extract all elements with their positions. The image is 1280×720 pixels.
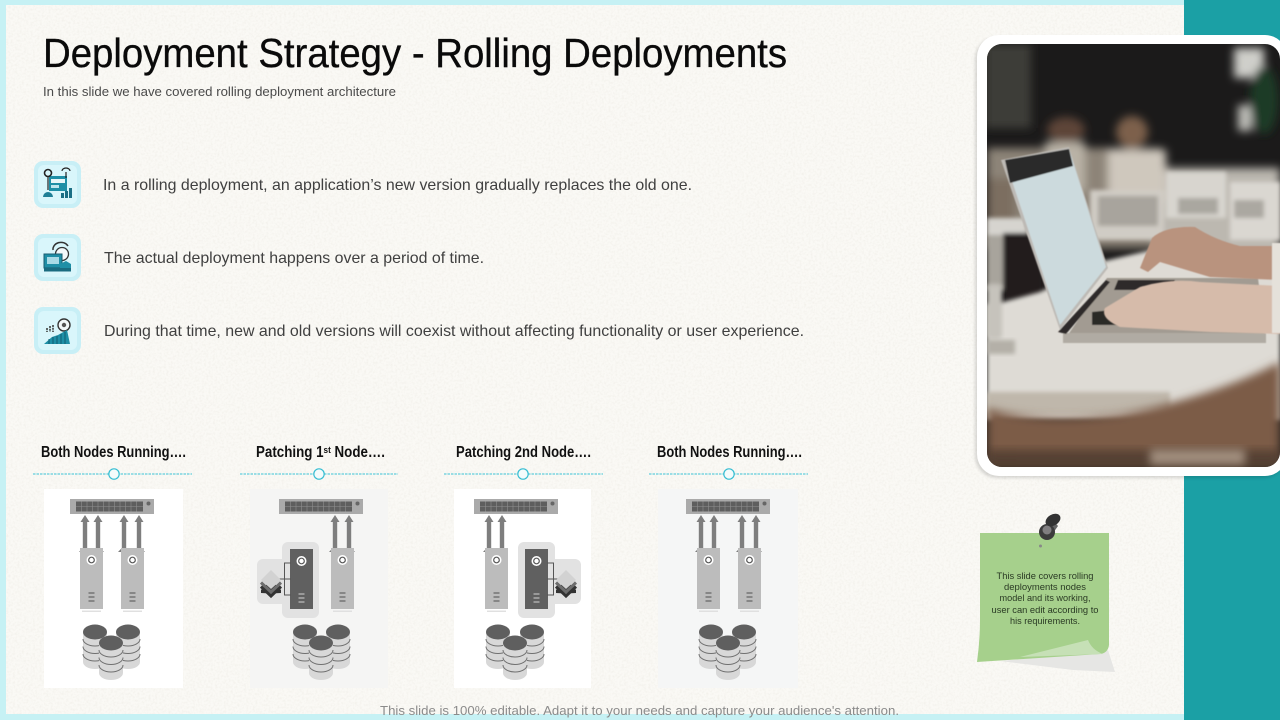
- footer note: This slide is 100% editable. Adapt it to your needs and capture your audience's attention.: [380, 704, 899, 718]
- bullet 1: [34, 161, 692, 208]
- heading: step 4: Both Nodes Running….: [657, 444, 802, 461]
- bullet 3: [34, 307, 804, 354]
- icon: network dashboard: [34, 161, 81, 208]
- sticky note: [977, 511, 1115, 672]
- panel: cluster diagram 3: [454, 489, 591, 688]
- icon: growth chart and coin: [34, 307, 81, 354]
- heading: step 3: Patching 2nd Node….: [456, 444, 591, 461]
- step 4: both nodes running: [649, 444, 808, 688]
- bullet text 2: The actual deployment happens over a period of time.: [104, 250, 484, 267]
- panel: cluster diagram 1: [44, 489, 183, 688]
- note text: user can edit according to: [992, 605, 1099, 615]
- note text: his requirements.: [1010, 616, 1080, 626]
- note text: deployments nodes: [1004, 582, 1087, 592]
- heading: step 2: st: [324, 445, 332, 456]
- icon: push pin: [1039, 511, 1063, 548]
- note text: [992, 571, 1099, 626]
- hands: [1104, 227, 1280, 334]
- step 3: patching 2nd node: [444, 444, 603, 688]
- blurred arm: [987, 362, 1280, 467]
- panel: cluster diagram 4: [658, 489, 798, 688]
- heading: step 1: Both Nodes Running….: [41, 444, 186, 461]
- note shadow page: [1000, 650, 1115, 672]
- laptop: [1001, 147, 1266, 343]
- heading: step 2: Node….: [331, 444, 385, 461]
- subtitle: In this slide we have covered rolling deployment architecture: [43, 84, 396, 99]
- photo: laptop in white frame: [975, 35, 1280, 478]
- timeline marker 2: [240, 469, 398, 479]
- bullet text 3: During that time, new and old versions will coexist without affecting functionality or user experience.: [104, 323, 804, 340]
- note text: This slide covers rolling: [996, 571, 1094, 581]
- icon: person at laptop: [34, 234, 81, 281]
- bullet text 1: In a rolling deployment, an application’s new version gradually replaces the old one.: [103, 177, 692, 194]
- mug: [987, 284, 1002, 339]
- note paper: [977, 533, 1109, 662]
- bullet 2: [34, 234, 484, 281]
- timeline marker 4: [649, 469, 808, 479]
- step 1: both nodes running: [33, 444, 192, 688]
- timeline marker 1: [33, 469, 192, 479]
- heading: step 2: Patching 1: [256, 444, 334, 461]
- step 2: patching 1st node: [240, 444, 398, 688]
- panel: cluster diagram 2: [250, 489, 388, 688]
- teal side band: [1184, 0, 1280, 720]
- note fold: [1020, 640, 1103, 657]
- note text: model and its working,: [1000, 593, 1090, 603]
- timeline marker 3: [444, 469, 603, 479]
- table: [987, 248, 1280, 420]
- title: Deployment Strategy - Rolling Deployments: [43, 30, 787, 76]
